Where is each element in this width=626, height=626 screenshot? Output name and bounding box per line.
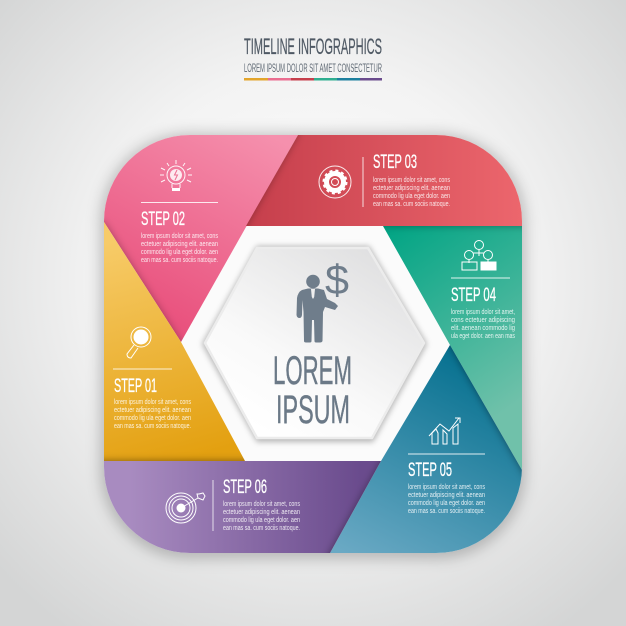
body text: ectetuer adipiscing elit. aenean (408, 492, 485, 499)
body text: commodo lig ula eget dolor. aen (114, 415, 191, 422)
rounded panel (104, 135, 522, 553)
step 02 content: STEP 02 (141, 209, 185, 230)
body text: commodo lig ula eget dolor. aen (223, 517, 300, 524)
colour bar (244, 78, 382, 80)
step 04 content: STEP 04 (451, 285, 496, 306)
body text: ectetuer adipiscing elit. aenean (223, 509, 300, 516)
step 03 content: STEP 03 (373, 152, 417, 173)
body text: commodo lig ula eget dolor. aen (408, 500, 485, 507)
segment: purple (104, 461, 381, 553)
body text: lorem ipsum dolor sit amet, cons (114, 399, 191, 406)
body text: ectetuer adipiscing elit. aenean (373, 185, 450, 192)
icon: magnifying glass (127, 327, 151, 358)
step 04 content (451, 240, 515, 340)
body text: commodo lig ula eget dolor. aen (373, 193, 450, 200)
segment: red (246, 135, 522, 226)
centre label (273, 349, 352, 432)
title block (244, 34, 382, 80)
body text: lorem ipsum dolor sit amet, cons (223, 501, 300, 508)
body text (408, 484, 485, 515)
step 05 content: STEP 05 (408, 460, 452, 481)
step 05 content (408, 418, 485, 515)
body text: lorem ipsum dolor sit amet, (451, 309, 515, 316)
subtitle: LOREM IPSUM DOLOR SIT AMET CONSECTETUR (244, 63, 382, 75)
step 01 content (113, 327, 191, 430)
segment: blue (330, 345, 522, 553)
body text: ean mas sa. cum sociis natoque. (223, 525, 300, 532)
segment: yellow (104, 222, 245, 461)
body text: cons ectetuer adipiscing (451, 317, 515, 324)
icon: businessman with dollar sign (296, 256, 349, 342)
body text (114, 399, 191, 430)
step 06 content: STEP 06 (223, 477, 267, 498)
step 06 content (166, 477, 300, 532)
body text: lorem ipsum dolor sit amet, cons (408, 484, 485, 491)
body text (451, 309, 515, 340)
body text: ean mas sa. cum sociis natoque. (408, 508, 485, 515)
body text: lorem ipsum dolor sit amet, cons (373, 177, 450, 184)
centre hexagon (202, 246, 427, 442)
hexagon shadow (202, 246, 427, 442)
body text: ectetuer adipiscing elit. aenean (114, 407, 191, 414)
body text: ean mas sa. cum sociis natoque. (114, 423, 191, 430)
segment: pink (104, 135, 298, 342)
centre label: LOREM (273, 349, 352, 393)
centre label: IPSUM (276, 388, 350, 432)
body text: ula eget dolor. aen ean mas (451, 333, 515, 340)
body text: commodo lig ula eget dolor. aen (141, 249, 218, 256)
body text (373, 177, 450, 208)
white centre base (104, 135, 522, 553)
icon: target and dart (166, 493, 205, 523)
body text: ean mas sa. cum sociis natoque. (141, 257, 218, 264)
step 01 content: STEP 01 (114, 376, 157, 397)
step 02 content (141, 160, 218, 264)
icon: businessman with dollar sign: $ (325, 256, 349, 303)
icon: gear with cycle arrows (319, 166, 351, 198)
body text: elit. aenean commodo lig (451, 325, 515, 332)
icon: team of people (462, 240, 496, 270)
icon: light bulb (160, 160, 192, 191)
icon: rising bar chart (429, 418, 460, 444)
hexagon face (205, 248, 424, 438)
body text (141, 233, 218, 264)
body text: ean mas sa. cum sociis natoque. (373, 201, 450, 208)
body text (223, 501, 300, 532)
rounded panel shadow (100, 133, 526, 559)
segment: green (383, 226, 522, 470)
body text: ectetuer adipiscing elit. aenean (141, 241, 218, 248)
step 03 content (319, 152, 450, 208)
body text: lorem ipsum dolor sit amet, cons (141, 233, 218, 240)
title: TIMELINE INFOGRAPHICS (244, 34, 382, 59)
